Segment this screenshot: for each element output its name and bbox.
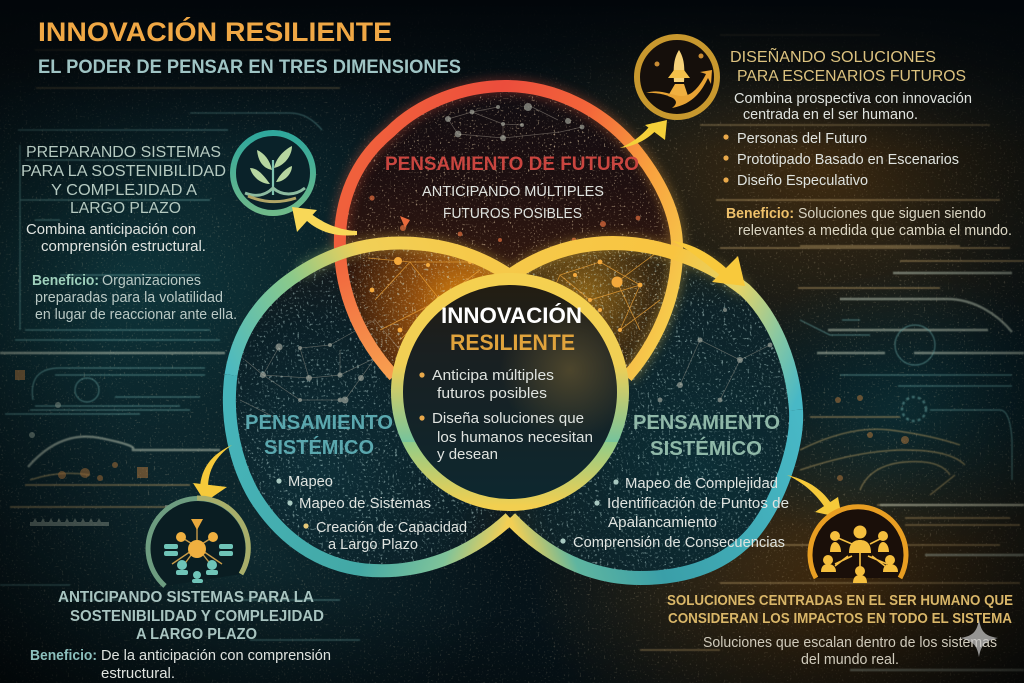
label: sistémico izquierdo: SISTÉMICO xyxy=(264,436,374,459)
icon: sparkle watermark xyxy=(960,619,998,657)
label: pensamiento de futuro: ANTICIPANDO MÚLTIPLES xyxy=(422,183,604,200)
description xyxy=(703,635,997,668)
icon: rocket xyxy=(637,37,717,117)
bullet list xyxy=(723,131,959,189)
centre bullet list: futuros posibles xyxy=(437,386,547,402)
heading xyxy=(21,144,226,217)
heading: LARGO PLAZO xyxy=(70,200,181,217)
benefit xyxy=(726,206,1012,239)
label: sistémico derecho xyxy=(560,412,789,551)
heading: A LARGO PLAZO xyxy=(136,626,257,643)
arrow: to network icon xyxy=(193,445,232,502)
description: centrada en el ser humano. xyxy=(743,107,918,123)
title: INNOVACIÓN RESILIENTE xyxy=(38,16,392,47)
ring: pensamiento sistémico izquierdo xyxy=(229,243,510,571)
benefit: Beneficio: xyxy=(30,648,97,664)
centre bullet list: y desean xyxy=(437,447,498,463)
label: sistémico derecho: SISTÉMICO xyxy=(650,437,762,460)
arrow: right circle top xyxy=(672,241,745,286)
heading: PARA ESCENARIOS FUTUROS xyxy=(737,68,966,85)
label: centre: RESILIENTE xyxy=(450,330,575,355)
arrow: to plant icon xyxy=(292,207,357,236)
label: sistémico derecho: PENSAMIENTO xyxy=(633,412,780,434)
centre bullet list: los humanos necesitan xyxy=(437,430,593,446)
subtitle: EL PODER DE PENSAR EN TRES DIMENSIONES xyxy=(38,57,461,78)
left bullet list: Creación de Capacidad xyxy=(316,520,467,536)
left bullet list: a Largo Plazo xyxy=(328,537,418,553)
icon: network xyxy=(148,498,248,586)
benefit: en lugar de reaccionar ante ella. xyxy=(35,307,237,323)
benefit: estructural. xyxy=(101,666,175,682)
description: comprensión estructural. xyxy=(41,239,206,255)
benefit: preparadas para la volatilidad xyxy=(35,290,223,306)
heading: SOSTENIBILIDAD Y COMPLEJIDAD xyxy=(70,608,324,625)
heading: Y COMPLEJIDAD A xyxy=(51,182,197,199)
description xyxy=(26,222,206,255)
ring: pensamiento sistémico derecho xyxy=(510,243,796,578)
heading: PREPARANDO SISTEMAS xyxy=(26,144,221,161)
description: del mundo real. xyxy=(801,652,899,668)
description: Soluciones que escalan dentro de los sistemas xyxy=(703,635,997,651)
bullet list: Prototipado Basado en Escenarios xyxy=(737,152,959,168)
label: pensamiento de futuro xyxy=(385,154,639,222)
venn glow xyxy=(300,86,745,377)
benefit: De la anticipación con comprensión xyxy=(101,648,331,664)
panel: anticipando sistemas xyxy=(30,589,331,682)
icon: plant xyxy=(233,133,313,213)
benefit: Beneficio: xyxy=(726,206,794,222)
heading: PARA LA SOSTENIBILIDAD xyxy=(21,163,226,180)
right bullet list xyxy=(560,476,789,551)
label: sistémico izquierdo: PENSAMIENTO xyxy=(245,412,393,434)
benefit xyxy=(32,273,237,323)
heading xyxy=(730,46,966,85)
centre bullet list: Diseña soluciones que xyxy=(432,411,584,427)
right bullet list: Apalancamiento xyxy=(608,515,717,531)
constellation network xyxy=(240,103,772,420)
benefit: Organizaciones xyxy=(102,273,201,289)
benefit: Beneficio: xyxy=(32,273,99,289)
heading: ANTICIPANDO SISTEMAS PARA LA xyxy=(58,589,314,606)
left bullet list xyxy=(276,474,467,553)
label: centre: INNOVACIÓN xyxy=(441,303,582,328)
arrow: to rocket icon xyxy=(620,120,667,148)
bullet list: Personas del Futuro xyxy=(737,131,867,147)
label: sistémico izquierdo xyxy=(245,412,467,553)
bullet list: Diseño Especulativo xyxy=(737,173,868,189)
panel: soluciones centradas xyxy=(667,593,1013,668)
panel: preparando sistemas xyxy=(21,144,237,323)
description: Combina anticipación con xyxy=(26,222,196,238)
right bullet list: Identificación de Puntos de xyxy=(607,496,789,512)
heading xyxy=(667,593,1013,627)
benefit: Soluciones que siguen siendo xyxy=(798,206,986,222)
left bullet list: Mapeo xyxy=(288,474,333,490)
centre bullet list: Anticipa múltiples xyxy=(432,368,554,384)
left bullet list: Mapeo de Sistemas xyxy=(299,496,431,512)
label: pensamiento de futuro: PENSAMIENTO DE FUTURO xyxy=(385,154,639,175)
benefit: relevantes a medida que cambia el mundo. xyxy=(738,223,1012,239)
panel: diseñando soluciones xyxy=(723,46,1012,239)
label: centre xyxy=(419,303,593,463)
right bullet list: Mapeo de Complejidad xyxy=(625,476,778,492)
label: pensamiento de futuro: FUTUROS POSIBLES xyxy=(443,206,582,222)
icon: people network xyxy=(810,507,906,583)
centre bullet list xyxy=(419,368,593,463)
description xyxy=(734,91,972,123)
description: Combina prospectiva con innovación xyxy=(734,91,972,107)
ring: pensamiento de futuro xyxy=(340,86,677,377)
arrow: to people icon xyxy=(787,475,842,518)
right bullet list: Comprensión de Consecuencias xyxy=(573,535,785,551)
heading xyxy=(58,589,324,643)
region fills of the three circles xyxy=(225,86,800,580)
heading: DISEÑANDO SOLUCIONES xyxy=(730,46,936,66)
ring: centre xyxy=(397,279,623,505)
benefit xyxy=(30,648,331,682)
